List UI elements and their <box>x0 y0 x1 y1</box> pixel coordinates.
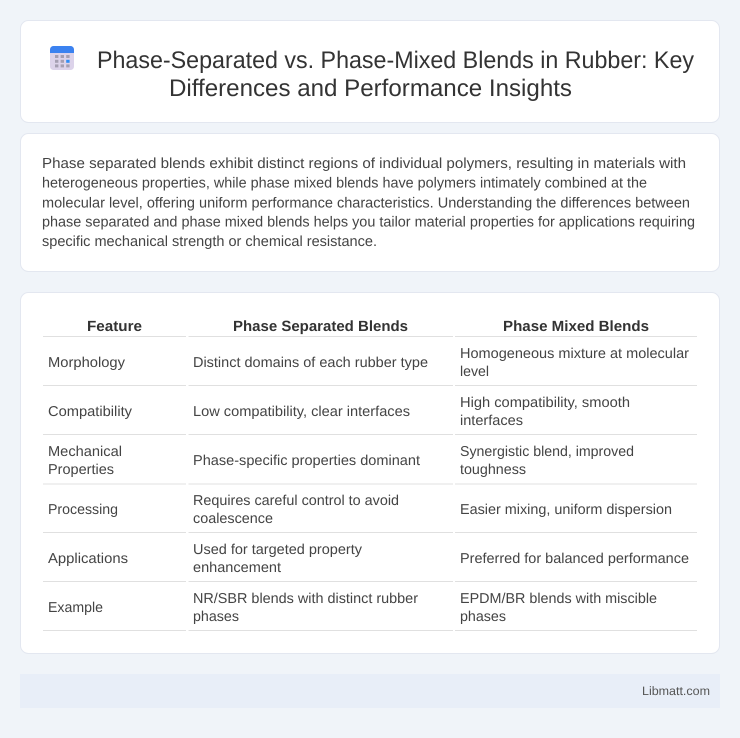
table header: Feature <box>87 319 142 335</box>
row: morphology: level <box>460 364 489 380</box>
row: processing: Processing <box>48 502 118 518</box>
row: compatibility <box>48 395 630 429</box>
row: processing: Easier mixing, uniform dispersion <box>460 502 672 518</box>
row: mechanical properties: Properties <box>48 462 114 478</box>
panel: title header <box>20 20 720 122</box>
row: morphology <box>48 346 689 380</box>
row: example: Example <box>48 600 103 616</box>
row: example: NR/SBR blends with distinct rubber <box>193 591 418 607</box>
row: mechanical properties: toughness <box>460 462 526 478</box>
text block: introduction <box>42 156 695 250</box>
panel: comparison table <box>20 292 720 654</box>
text block: introduction: molecular level, offering uniform performance characteristics. Understanding the differences between <box>42 196 690 212</box>
row: example: phases <box>460 609 506 625</box>
row: processing: Requires careful control to avoid <box>193 493 399 509</box>
table header: Phase Mixed Blends <box>503 319 649 335</box>
text block: introduction: Phase separated blends exhibit distinct regions of individual polymers, resulting in materials with <box>42 156 686 172</box>
row: mechanical properties <box>48 444 634 478</box>
row: morphology: Morphology <box>48 355 126 371</box>
row: applications: Used for targeted property <box>193 542 363 558</box>
row: applications: Preferred for balanced performance <box>460 551 689 567</box>
row: mechanical properties: Mechanical <box>48 444 122 460</box>
row: processing: coalescence <box>193 511 273 527</box>
text block: introduction: specific mechanical strength or chemical resistance. <box>42 234 377 250</box>
row: processing <box>48 493 672 527</box>
icon: calendar <box>50 46 74 70</box>
title: Phase-Separated vs. Phase-Mixed Blends in Rubber: Key <box>97 47 694 74</box>
table header <box>87 319 649 335</box>
text block: introduction: heterogeneous properties, while phase mixed blends have polymers intimately combined at the <box>42 176 647 192</box>
panel: introduction <box>20 134 720 272</box>
row: compatibility: Compatibility <box>48 404 133 420</box>
row: example: EPDM/BR blends with miscible <box>460 591 657 607</box>
row: example: phases <box>193 609 239 625</box>
row: compatibility: High compatibility, smooth <box>460 395 630 411</box>
row: morphology: Distinct domains of each rubber type <box>193 355 428 371</box>
text block: introduction: phase separated and phase mixed blends helps you tailor material properties for applications requiring <box>42 214 695 230</box>
row: applications <box>48 542 689 576</box>
title <box>97 47 694 102</box>
title: Differences and Performance Insights <box>169 75 572 102</box>
footer <box>20 674 720 708</box>
row: morphology: Homogeneous mixture at molecular <box>460 346 689 362</box>
row: example <box>48 591 657 625</box>
row: mechanical properties: Synergistic blend, improved <box>460 444 634 460</box>
row: compatibility: Low compatibility, clear interfaces <box>193 404 410 420</box>
row: applications: enhancement <box>193 560 281 576</box>
row: mechanical properties: Phase-specific properties dominant <box>193 453 420 469</box>
row: applications: Applications <box>48 551 128 567</box>
row: compatibility: interfaces <box>460 413 523 429</box>
footer: Libmatt.com <box>642 684 710 698</box>
table header: Phase Separated Blends <box>233 319 408 335</box>
